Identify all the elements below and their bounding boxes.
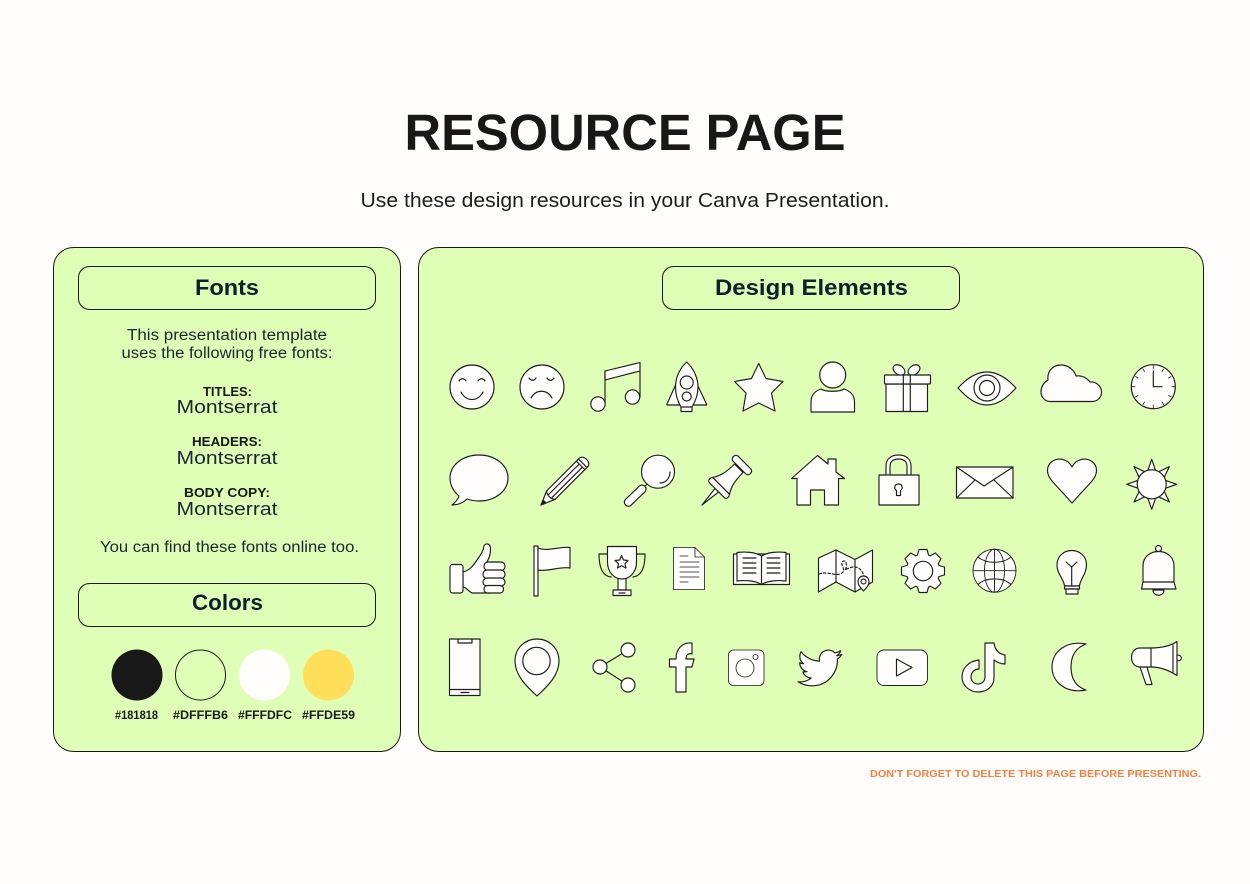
panel: design elements: [418, 248, 1204, 752]
icon: eye: [958, 372, 1016, 405]
icon: sad face: [520, 365, 564, 409]
heading: colors: Colors: [192, 590, 263, 615]
icon: gear: [902, 550, 944, 592]
text block: font intro: uses the following free fonts:: [122, 345, 332, 362]
swatch: #FFFDFC: #FFFDFC: [238, 710, 292, 722]
icon: thumbs up: [450, 544, 505, 593]
icon: folded map: [818, 550, 872, 592]
swatch: #181818: #181818: [115, 710, 159, 722]
swatch: #181818: [112, 650, 162, 722]
icon: trophy: [599, 546, 645, 596]
heading: fonts: Fonts: [195, 275, 259, 300]
icon: music note: [591, 362, 640, 411]
swatch: #DFFFB6: [173, 650, 228, 722]
text block: body copy font: Montserrat: [176, 498, 278, 519]
text block: titles font: [176, 384, 278, 417]
heading: design elements: [662, 266, 960, 310]
icon: speech bubble: [450, 455, 508, 505]
icon: facebook: [670, 643, 694, 692]
text block: font note: You can find these fonts online too.: [100, 539, 359, 556]
swatch: #FFDE59: #FFDE59: [302, 710, 355, 722]
icon: smartphone: [450, 639, 480, 696]
text block: headers font: HEADERS:: [192, 434, 262, 449]
icon: house: [792, 456, 844, 505]
icon: push pin: [693, 453, 754, 514]
icon: youtube play: [877, 650, 928, 686]
heading: colors: [78, 584, 376, 626]
icon: gift: [884, 363, 930, 412]
icon: person: [811, 362, 854, 412]
icon: pencil: [537, 455, 591, 509]
icon: magnifying glass: [623, 455, 674, 508]
icon: clock: [1131, 365, 1175, 409]
swatch: #FFDE59: [302, 650, 355, 722]
footer note: DON'T FORGET TO DELETE THIS PAGE BEFORE PRESENTING.: [870, 768, 1201, 780]
icon: location pin: [515, 639, 559, 696]
icon: heart: [1048, 459, 1096, 503]
icon: cloud: [1041, 365, 1102, 402]
icon: star: [734, 364, 783, 411]
heading: fonts: [78, 266, 376, 310]
icon: crescent moon: [1052, 643, 1086, 691]
text block: body copy font: [176, 485, 278, 519]
panel: fonts and colors: [54, 248, 400, 752]
text block: font intro: This presentation template: [127, 327, 327, 344]
icon: open book: [734, 552, 790, 584]
icon: sun: [1127, 459, 1177, 509]
icon: megaphone: [1132, 642, 1181, 684]
icon: bell: [1142, 546, 1176, 595]
icon: envelope: [956, 467, 1013, 498]
text block: titles font: TITLES:: [203, 384, 252, 399]
icon: smile: [450, 365, 494, 409]
swatch: #FFFDFC: [238, 650, 292, 722]
icon: flag: [534, 546, 570, 596]
icon: twitter bird: [798, 650, 842, 686]
subtitle: Use these design resources in your Canva Presentation.: [360, 190, 890, 212]
icon: tiktok: [962, 643, 1005, 692]
icon: light bulb: [1057, 550, 1086, 594]
icon: rocket: [667, 362, 706, 412]
heading: design elements: Design Elements: [715, 275, 908, 300]
swatch: #DFFFB6: #DFFFB6: [173, 710, 228, 722]
text block: titles font: Montserrat: [176, 396, 278, 417]
icon: share: [593, 643, 635, 692]
icon: globe: [973, 549, 1016, 592]
icon: document: [674, 548, 704, 590]
icon: instagram: [728, 650, 764, 686]
title: RESOURCE PAGE: [404, 104, 846, 161]
icon: padlock: [879, 455, 919, 505]
text block: headers font: Montserrat: [176, 447, 278, 468]
text block: headers font: [176, 434, 278, 468]
text block: font intro: [122, 327, 332, 362]
text block: body copy font: BODY COPY:: [184, 485, 270, 500]
